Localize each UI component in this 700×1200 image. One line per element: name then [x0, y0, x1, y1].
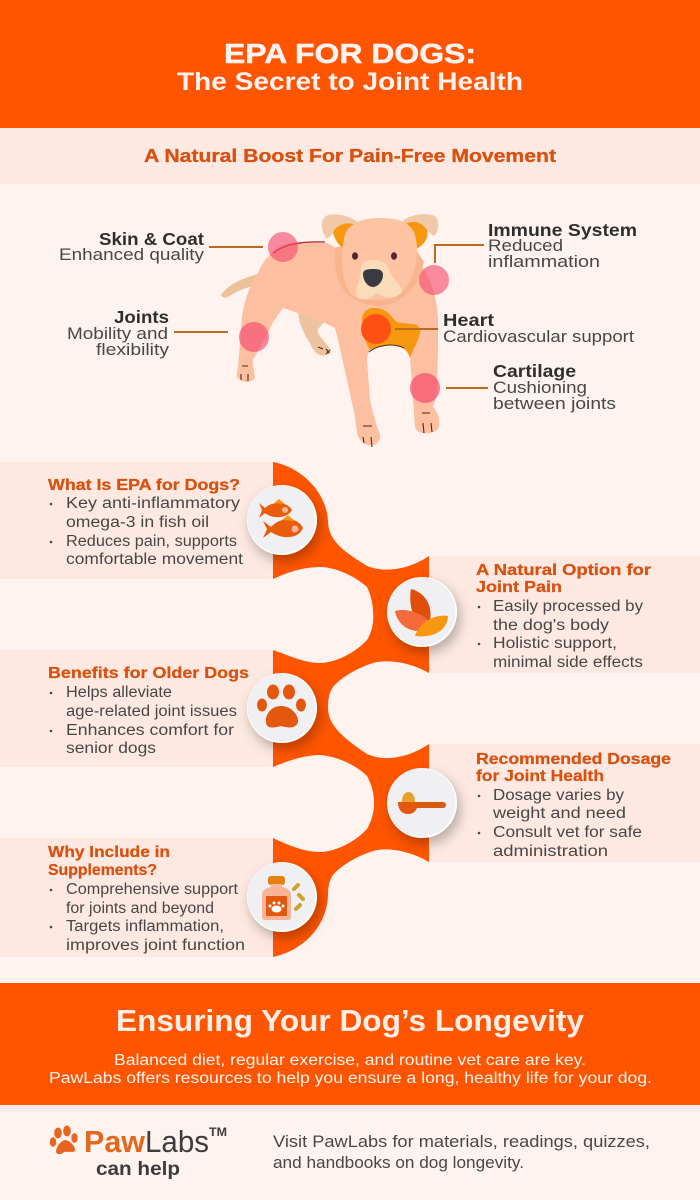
icon: scoop: [387, 768, 457, 838]
marker: skin and coat: [268, 232, 298, 262]
panel: supplements: Comprehensive support: [66, 881, 239, 898]
panel: older dogs: senior dogs: [66, 740, 156, 757]
callout: immune system: Reduced: [488, 237, 563, 255]
callout: cartilage: [446, 361, 616, 413]
head: [342, 218, 417, 300]
ribbon connector: [273, 462, 429, 957]
panel: older dogs: Enhances comfort for: [66, 722, 234, 739]
tail: [221, 274, 258, 298]
marker: cartilage: [410, 373, 440, 403]
callout: heart: [395, 310, 634, 346]
neck shade: [335, 247, 424, 306]
panel: natural option: Holistic support,: [493, 635, 617, 652]
closing banner: [0, 983, 700, 1105]
panel: supplements: Supplements?: [48, 862, 157, 879]
callout: cartilage: between joints: [493, 395, 616, 413]
icon: leaves: [387, 577, 457, 647]
paw claws: [241, 347, 432, 447]
closing text: Balanced diet, regular exercise, and routine vet care are key.: [114, 1052, 586, 1069]
panel: dosage: Consult vet for safe: [493, 824, 642, 841]
panel: older dogs: [0, 650, 273, 767]
eyes: [352, 252, 358, 260]
logo: TM: [209, 1125, 227, 1139]
icon: paw: [247, 673, 317, 743]
leg line: [369, 345, 404, 352]
panel: supplements: Why Include in: [48, 844, 170, 861]
panel: natural option: [429, 556, 700, 673]
callout: cartilage: Cartilage: [493, 361, 576, 381]
callout: skin and coat: [59, 229, 263, 264]
panel: supplements: Targets inflammation,: [66, 918, 224, 935]
back line: [273, 242, 325, 253]
dog illustration: [221, 214, 449, 447]
panel: natural option: Joint Pain: [476, 579, 562, 596]
dog body: [237, 242, 439, 445]
logo: Labs: [145, 1124, 209, 1159]
heart patch: [362, 308, 420, 358]
closing heading: Ensuring Your Dog’s Longevity: [116, 1003, 585, 1038]
callout: cartilage: Cushioning: [493, 379, 587, 397]
callout: heart: Heart: [443, 310, 494, 330]
callout: skin and coat: Enhanced quality: [59, 246, 205, 264]
callout: skin and coat: Skin & Coat: [99, 229, 204, 249]
panel: natural option: A Natural Option for: [476, 562, 651, 579]
callout: immune system: Immune System: [488, 220, 637, 240]
callout: joints: flexibility: [96, 341, 170, 359]
panel: what is EPA: [0, 462, 273, 579]
nose: [363, 269, 383, 287]
marker: immune system: [419, 265, 449, 295]
panel: supplements: improves joint function: [66, 937, 245, 954]
panel: natural option: minimal side effects: [493, 654, 643, 671]
logo: [50, 1124, 227, 1180]
panel: dosage: Dosage varies by: [493, 787, 624, 804]
icon: fish: [247, 485, 317, 555]
panel: dosage: weight and need: [492, 805, 626, 822]
logo: can help: [96, 1159, 180, 1180]
icon: logo paw: [50, 1126, 78, 1154]
marker: joints: [239, 322, 269, 352]
panel: older dogs: age-related joint issues: [66, 703, 237, 720]
header banner: [0, 0, 700, 128]
panel: natural option: the dog's body: [493, 617, 609, 634]
panel: what is EPA: Reduces pain, supports: [66, 533, 237, 550]
panel: what is EPA: Key anti-inflammatory: [66, 495, 240, 512]
logo: Paw: [84, 1124, 146, 1159]
icon: supplement bottle: [247, 862, 317, 932]
panel: natural option: Easily processed by: [493, 598, 643, 615]
footer text: Visit PawLabs for materials, readings, quizzes,: [273, 1132, 650, 1151]
panel: supplements: [0, 838, 273, 957]
panel: dosage: [429, 744, 700, 862]
panel: what is EPA: What Is EPA for Dogs?: [48, 477, 240, 494]
panel: supplements: for joints and beyond: [66, 900, 214, 917]
callout: joints: Joints: [114, 307, 169, 327]
section heading band: [0, 128, 700, 184]
panel: dosage: administration: [493, 843, 608, 860]
marker: heart: [361, 314, 391, 344]
panel: older dogs: Helps alleviate: [66, 684, 172, 701]
callout: immune system: [435, 220, 637, 271]
panel: older dogs: Benefits for Older Dogs: [48, 665, 249, 682]
far front leg: [298, 313, 331, 355]
section heading band: A Natural Boost For Pain-Free Movement: [144, 145, 556, 166]
callout: heart: Cardiovascular support: [443, 328, 634, 346]
callout: joints: [67, 307, 228, 359]
title: EPA FOR DOGS:: [224, 38, 476, 69]
panel: dosage: for Joint Health: [476, 768, 604, 785]
callout: immune system: inflammation: [488, 253, 600, 271]
footer text: [273, 1132, 650, 1172]
left ear: [322, 214, 358, 248]
callout: joints: Mobility and: [67, 325, 168, 343]
subtitle: The Secret to Joint Health: [177, 68, 523, 96]
closing banner: PawLabs offers resources to help you ensure a long, healthy life for your dog.: [49, 1070, 652, 1087]
muzzle: [356, 260, 402, 299]
right ear: [401, 214, 438, 249]
panel: what is EPA: omega-3 in fish oil: [66, 514, 209, 531]
panel: dosage: Recommended Dosage: [476, 751, 671, 768]
panel: what is EPA: comfortable movement: [66, 551, 244, 568]
footer text: and handbooks on dog longevity.: [273, 1153, 524, 1172]
